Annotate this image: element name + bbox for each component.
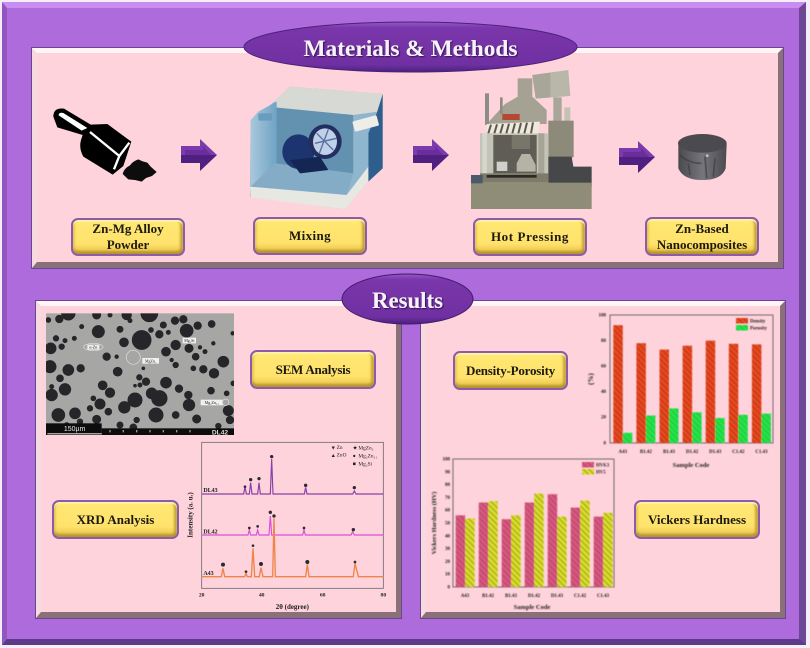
density-porosity bar chart: D1.42 [686,450,699,455]
icon: mixer machine [250,87,383,209]
Vickers hardness bar chart: 40 [445,534,450,539]
button: Vickers Hardness [634,500,760,539]
XRD series DL43 [202,459,383,494]
button: Density-Porosity: Density-Porosity [466,362,555,378]
SEM micrograph: 150µm [64,426,86,433]
XRD chart: 60 [320,592,326,598]
XRD chart: ★ [353,445,358,451]
button: Zn-Mg Alloy Powder: Zn-Mg Alloy [92,221,164,236]
button: Vickers Hardness: Vickers Hardness [648,512,746,526]
XRD chart: Mg₂Si [358,462,373,468]
button: Zn-Based Nanocomposites: Nanocomposites [657,236,747,252]
arrow: mixing to hot pressing [413,139,449,171]
Vickers hardness bar chart: 80 [445,483,450,488]
button: Hot Pressing [473,218,587,256]
Vickers hardness bar chart: 50 [445,522,450,526]
SEM micrograph: Mg₂Si [184,338,195,343]
density-porosity bar chart: 60 [601,364,606,370]
button: Density-Porosity [453,351,568,390]
SEM micrograph: MgZn₂ [145,358,157,363]
density bars [613,325,761,443]
density-porosity bar chart: D1.43 [709,450,722,455]
density-porosity bar chart: B1.43 [663,450,676,455]
XRD chart: DL43 [203,488,218,494]
XRD chart: DL42 [203,529,218,535]
density-porosity bar chart: C1.43 [755,450,768,455]
icon: powder scoop [53,108,157,182]
Vickers hardness bar chart: D1.43 [551,594,564,599]
Vickers hardness bar chart: B1.43 [505,594,518,599]
hardness legend: HV0.3 [596,464,610,468]
density-porosity bar chart: 40 [601,390,606,395]
Vickers hardness bar chart: 0 [448,586,450,590]
XRD chart: 80 [381,592,386,598]
icon: hot press machine [471,70,592,209]
SEM micrograph: DL42 [212,429,228,436]
heading: Materials & Methods [244,22,577,72]
Vickers hardness bar chart: A43 [461,594,470,599]
Vickers hardness bar chart: 90 [445,470,450,475]
Vickers hardness bar chart: 10 [445,573,450,578]
density-porosity bar chart: A43 [618,450,628,455]
hardness legend: HV5 [596,470,606,476]
density legend: Density [750,320,766,324]
XRD chart: ■ [353,462,356,468]
button: SEM Analysis [250,350,376,389]
button: SEM Analysis: SEM Analysis [276,362,350,376]
button: Hot Pressing: Hot Pressing [491,229,569,244]
heading: Results: Results [372,288,443,313]
density-porosity bar chart [587,314,773,469]
XRD chart [187,442,386,611]
XRD chart: 2θ (degree) [276,603,310,611]
XRD chart: Zn [337,445,343,451]
Vickers hardness bar chart [431,458,614,611]
button: XRD Analysis: XRD Analysis [77,512,154,526]
button: Mixing: Mixing [289,228,331,243]
panel: results left [36,301,401,618]
density legend: Porosity [750,326,768,332]
density-porosity bar chart: 80 [601,339,606,344]
XRD chart: ZnO [337,453,347,459]
Vickers hardness bar chart: 70 [445,496,450,501]
XRD series DL42 [202,516,383,535]
Vickers hardness bar chart: 20 [445,560,450,565]
XRD chart: A43 [203,571,214,577]
hardness legend [582,462,610,476]
density-porosity bar chart: 20 [601,416,606,420]
icon: nanocomposite pellet [678,134,727,180]
density-porosity bar chart: 0 [604,442,606,446]
density-porosity bar chart: C1.42 [732,450,745,455]
button: Zn-Mg Alloy Powder: Powder [107,237,149,252]
SEM micrograph: α-Zn [89,345,97,350]
XRD chart: 20 [199,592,205,598]
HV5 bars [465,494,613,587]
button: Zn-Based Nanocomposites [645,217,759,256]
density-porosity bar chart: (%) [587,373,595,385]
SEM micrograph [44,305,236,436]
button: Zn-Based Nanocomposites: Zn-Based [675,220,729,236]
button: Mixing [253,217,367,255]
density-porosity bar chart: 100 [598,314,606,318]
panel: materials and methods [32,48,783,268]
XRD chart: ▼ [331,445,336,451]
XRD chart: Mg₂Zn₁₁ [358,453,377,459]
button: XRD Analysis [52,500,179,539]
Vickers hardness bar chart: 60 [445,509,450,514]
Vickers hardness bar chart: C1.42 [574,594,587,599]
XRD chart: 40 [259,592,265,598]
XRD chart: Intensity (a. u.) [187,492,195,538]
button: Zn-Mg Alloy Powder [71,218,185,256]
SEM micrograph: Mg₂Zn₁₁ [205,400,219,405]
arrow: hot pressing to nanocomposite [619,141,655,173]
heading: Results [342,274,473,324]
density legend [736,318,768,332]
panel: results right [421,301,785,618]
Vickers hardness bar chart: 30 [445,547,450,552]
Vickers hardness bar chart: B1.42 [482,594,495,599]
arrow: powder to mixing [181,139,217,171]
heading: Materials & Methods: Materials & Methods [304,36,518,61]
Vickers hardness bar chart: Sample Code [514,604,550,611]
Vickers hardness bar chart: D1.42 [528,594,541,599]
Vickers hardness bar chart: Vickers Hardness (HV) [431,492,438,554]
XRD chart: ▲ [331,453,336,459]
density-porosity bar chart: B1.42 [640,450,652,455]
XRD chart: ● [353,453,356,459]
HV0.3 bars [456,494,603,587]
density-porosity bar chart: Sample Code [673,462,709,469]
XRD chart: MgZn₂ [358,445,374,451]
Vickers hardness bar chart: C1.43 [597,594,610,599]
XRD series A43 [202,518,383,577]
Vickers hardness bar chart: 100 [442,458,450,462]
porosity bars [623,408,771,443]
